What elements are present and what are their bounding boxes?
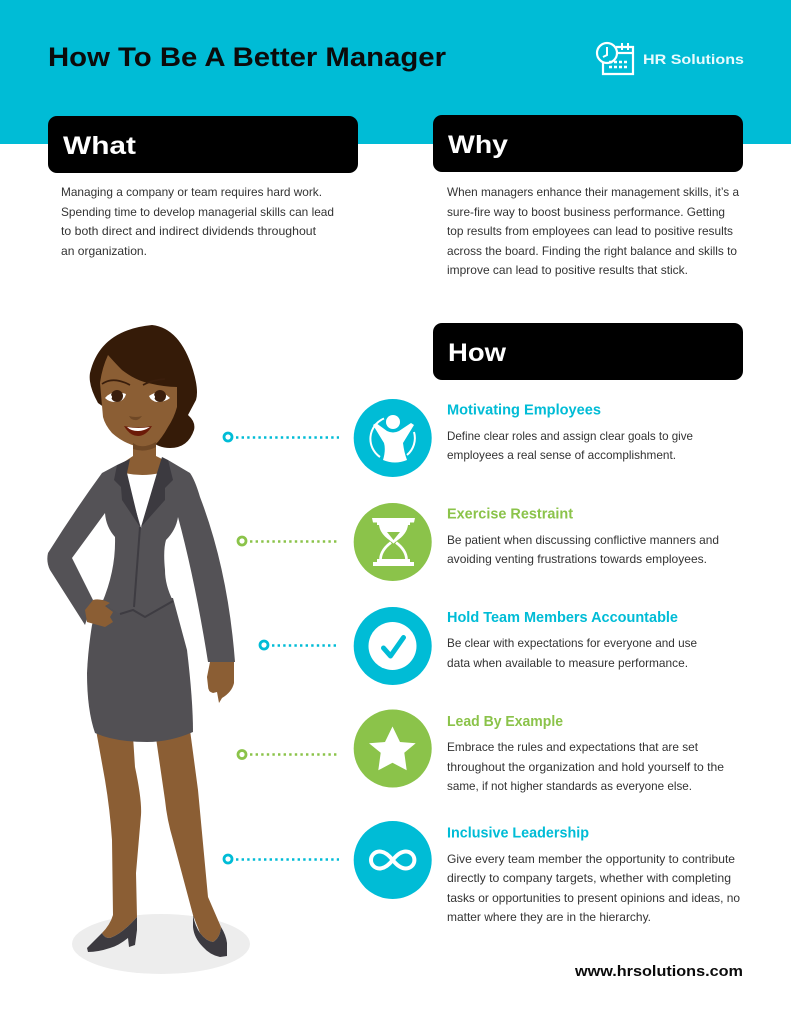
body text: Be patient when discussing conflictive manners and <box>447 533 719 547</box>
body text <box>447 533 719 566</box>
brand name: HR Solutions <box>643 51 744 67</box>
icon: hourglass <box>354 503 432 581</box>
hair <box>90 325 197 448</box>
icon: clock and calendar <box>597 43 633 74</box>
body text <box>447 740 724 793</box>
item: motivating employees <box>354 399 693 477</box>
body text: throughout the organization and hold yourself to the <box>447 760 724 774</box>
website url: www.hrsolutions.com <box>574 964 743 980</box>
body text: Be clear with expectations for everyone and use <box>447 636 697 650</box>
connector 2 <box>238 537 339 545</box>
body text: same, if not higher standards as everyone else. <box>447 779 692 793</box>
jacket seams <box>120 527 173 617</box>
body text <box>447 429 693 462</box>
item: exercise restraint <box>354 503 719 581</box>
left hand <box>85 599 113 627</box>
text: why: improve can lead to positive results that stick. <box>447 263 688 277</box>
body text: Give every team member the opportunity to contribute <box>447 852 735 866</box>
heading: how <box>433 323 743 380</box>
body text: Define clear roles and assign clear goals to give <box>447 429 693 443</box>
body text: tasks or opportunities to present opinions and ideas, no <box>447 891 740 905</box>
icon: star <box>354 710 432 788</box>
body text: Embrace the rules and expectations that are set <box>447 740 699 754</box>
neck shadow <box>133 442 156 451</box>
heading: what: What <box>63 132 137 160</box>
eyebrows <box>102 379 165 385</box>
heading: Hold Team Members Accountable <box>447 610 678 626</box>
heading: how: How <box>448 339 507 367</box>
body text: avoiding venting frustrations towards employees. <box>447 552 707 566</box>
item: lead by example <box>354 710 724 793</box>
text: why <box>447 185 739 277</box>
connector 1 <box>224 433 339 441</box>
face <box>100 355 177 446</box>
right hand <box>207 662 234 703</box>
heading: Exercise Restraint <box>447 506 573 522</box>
heading: why <box>433 115 743 172</box>
text: why: top results from employees can lead to positive results <box>447 224 733 238</box>
heading: why: Why <box>448 131 508 159</box>
lapels <box>114 457 173 527</box>
heading: what <box>48 116 358 173</box>
panel: what <box>48 116 358 258</box>
illustration: businesswoman <box>47 325 250 974</box>
body text: matter where they are in the hierarchy. <box>447 910 651 924</box>
icon: cheering person <box>354 399 432 477</box>
neck <box>118 436 168 478</box>
connector 3 <box>260 641 339 649</box>
title: How To Be A Better Manager <box>48 42 447 72</box>
item: hold team members accountable <box>354 607 697 685</box>
mouth <box>124 426 152 436</box>
text: what: Spending time to develop managerial skills can lead <box>61 205 334 219</box>
text: why: sure-fire way to boost business performance. Getting <box>447 205 725 219</box>
text: what: Managing a company or team requires hard work. <box>61 185 322 199</box>
connector 4 <box>238 750 339 758</box>
text: why: When managers enhance their management skills, it’s a <box>447 185 739 199</box>
eyes <box>105 390 170 402</box>
shoes <box>87 915 227 957</box>
heading: Motivating Employees <box>447 402 601 418</box>
nose <box>129 416 142 420</box>
body text: employees a real sense of accomplishment. <box>447 448 676 462</box>
body text: directly to company targets, whether with completing <box>447 871 731 885</box>
skirt <box>87 598 193 742</box>
text: why: across the board. Finding the right balance and skills to <box>447 244 737 258</box>
body text <box>447 636 697 670</box>
logo: HR Solutions <box>597 43 744 74</box>
body text <box>447 852 740 924</box>
floor shadow <box>72 914 250 974</box>
icon: infinity <box>354 821 432 899</box>
panel: why <box>433 115 743 277</box>
connector 5 <box>224 855 339 863</box>
jacket <box>47 460 235 662</box>
legs <box>96 730 221 942</box>
heading: Lead By Example <box>447 714 563 730</box>
text: what <box>61 185 334 258</box>
text: what: an organization. <box>61 244 147 258</box>
blouse <box>125 473 160 530</box>
text: what: to both direct and indirect dividends throughout <box>61 224 317 238</box>
icon: check mark <box>354 607 432 685</box>
heading: Inclusive Leadership <box>447 826 589 842</box>
header band <box>0 0 791 144</box>
body text: data when available to measure performance. <box>447 656 688 670</box>
connectors <box>224 433 339 863</box>
item: inclusive leadership <box>354 821 740 924</box>
